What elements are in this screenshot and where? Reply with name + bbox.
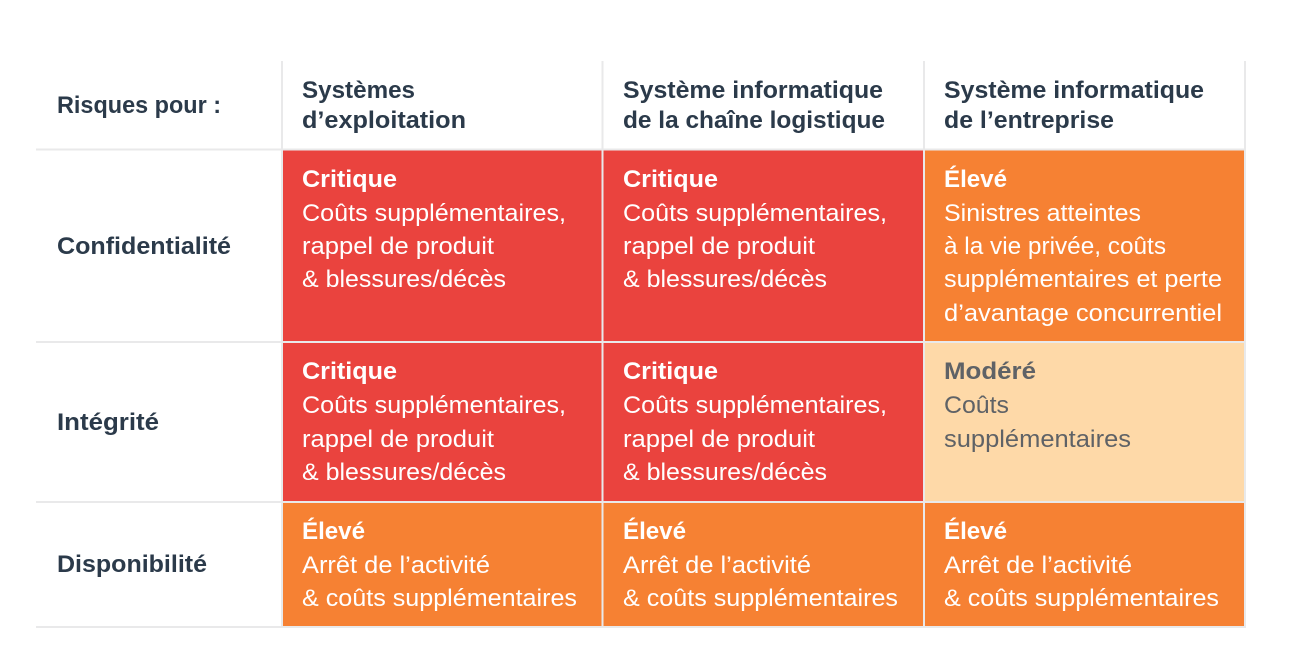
cell: Confidentialité / entreprise, élevé: Élevé <box>944 165 1007 193</box>
cell: Intégrité / exploitation, critique <box>283 343 602 501</box>
cell: Intégrité / entreprise, modéré: supplémentaires <box>944 426 1131 453</box>
cell: Confidentialité / chaîne logistique, critique: Critique <box>623 166 718 193</box>
cell: Confidentialité / chaîne logistique, critique: rappel de produit <box>623 233 815 260</box>
cell: Intégrité / exploitation, critique: & blessures/décès <box>302 459 506 486</box>
cell: Disponibilité / chaîne logistique, élevé <box>604 503 923 626</box>
column header: Système informatique de la chaîne logistique: de la chaîne logistique <box>623 107 885 134</box>
cell: Confidentialité / exploitation, critique: & blessures/décès <box>302 266 506 293</box>
cell: Disponibilité / chaîne logistique, élevé: Élevé <box>623 517 686 545</box>
cell: Intégrité / entreprise, modéré: Coûts <box>944 392 1009 419</box>
cell: Confidentialité / entreprise, élevé: à la vie privée, coûts <box>944 233 1166 260</box>
cell: Confidentialité / entreprise, élevé: d’avantage concurrentiel <box>944 300 1222 327</box>
cell: Confidentialité / chaîne logistique, critique: Coûts supplémentaires, <box>623 200 887 227</box>
cell: Confidentialité / entreprise, élevé: Sinistres atteintes <box>944 200 1141 227</box>
cell: Disponibilité / entreprise, élevé: & coûts supplémentaires <box>944 585 1219 612</box>
column header: Système informatique de l'entreprise <box>944 77 1204 134</box>
cell: Confidentialité / entreprise, élevé <box>925 150 1244 341</box>
cell: Intégrité / chaîne logistique, critique <box>604 343 923 501</box>
cell: Confidentialité / exploitation, critique: Critique <box>302 166 397 193</box>
cell: Confidentialité / chaîne logistique, critique: & blessures/décès <box>623 266 827 293</box>
cell: Disponibilité / entreprise, élevé: Arrêt de l’activité <box>944 552 1132 579</box>
column header: Système informatique de l'entreprise: de l’entreprise <box>944 107 1114 134</box>
cell: Intégrité / exploitation, critique: rappel de produit <box>302 426 494 453</box>
cell: Disponibilité / chaîne logistique, élevé: & coûts supplémentaires <box>623 585 898 612</box>
row label: Disponibilité: Disponibilité <box>57 551 207 578</box>
row header: Risques pour: Risques pour : <box>57 92 221 119</box>
row label: Intégrité: Intégrité <box>57 409 159 436</box>
cell: Confidentialité / entreprise, élevé: supplémentaires et perte <box>944 266 1222 293</box>
cell: Disponibilité / chaîne logistique, élevé: Arrêt de l’activité <box>623 552 811 579</box>
cell: Disponibilité / exploitation, élevé <box>283 503 602 626</box>
cell: Disponibilité / exploitation, élevé: Arrêt de l’activité <box>302 552 490 579</box>
column header: Système informatique de la chaîne logistique: Système informatique <box>623 77 883 104</box>
cell: Disponibilité / exploitation, élevé: Élevé <box>302 517 365 545</box>
column header: Systèmes d'exploitation <box>302 77 466 134</box>
row label: Confidentialité: Confidentialité <box>57 233 231 260</box>
cell: Intégrité / entreprise, modéré: Modéré <box>944 358 1036 385</box>
cell: Intégrité / exploitation, critique: Coûts supplémentaires, <box>302 392 566 419</box>
cell: Disponibilité / entreprise, élevé: Élevé <box>944 517 1007 545</box>
column header: Systèmes d'exploitation: d’exploitation <box>302 107 466 134</box>
column header: Systèmes d'exploitation: Systèmes <box>302 77 415 104</box>
cell: Confidentialité / exploitation, critique <box>283 150 602 341</box>
cell: Disponibilité / entreprise, élevé <box>925 503 1244 626</box>
cell: Intégrité / chaîne logistique, critique: Coûts supplémentaires, <box>623 392 887 419</box>
cell: Intégrité / entreprise, modéré <box>925 343 1244 501</box>
column header: Système informatique de la chaîne logistique <box>623 77 885 134</box>
cell: Intégrité / chaîne logistique, critique: & blessures/décès <box>623 459 827 486</box>
cell: Confidentialité / exploitation, critique: rappel de produit <box>302 233 494 260</box>
cell: Confidentialité / chaîne logistique, critique <box>604 150 923 341</box>
cell: Intégrité / exploitation, critique: Critique <box>302 358 397 385</box>
column header: Système informatique de l'entreprise: Système informatique <box>944 77 1204 104</box>
cell: Disponibilité / exploitation, élevé: & coûts supplémentaires <box>302 585 577 612</box>
cell: Intégrité / chaîne logistique, critique: rappel de produit <box>623 426 815 453</box>
cell: Confidentialité / exploitation, critique: Coûts supplémentaires, <box>302 200 566 227</box>
cell: Intégrité / chaîne logistique, critique: Critique <box>623 358 718 385</box>
